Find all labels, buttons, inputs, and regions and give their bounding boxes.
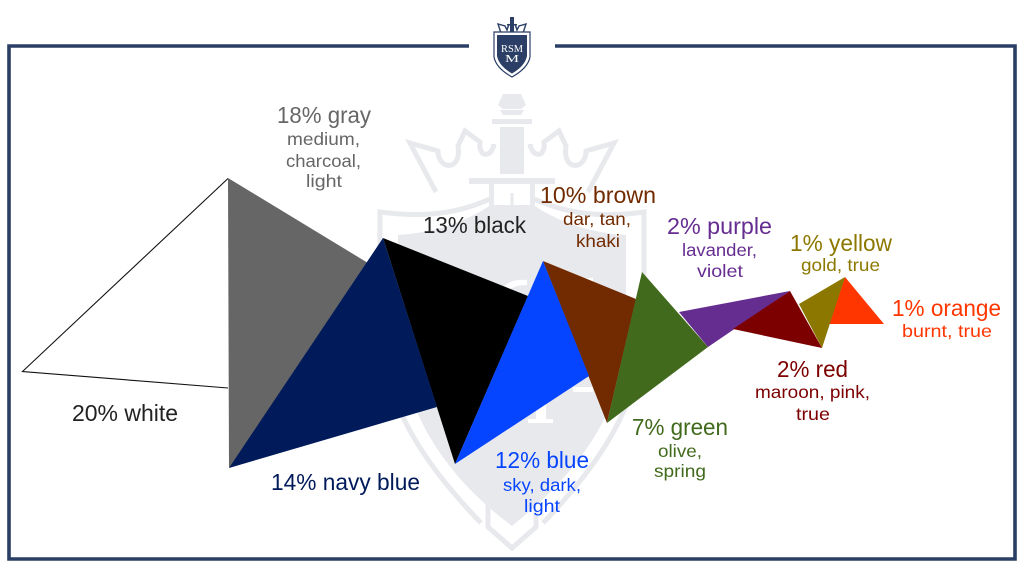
label: orange	[892, 295, 1001, 341]
green segment	[607, 272, 708, 423]
label: red: maroon, pink,	[755, 382, 870, 402]
logo monogram	[501, 44, 523, 65]
label: green: spring	[654, 461, 706, 481]
label: orange: burnt, true	[902, 321, 992, 341]
label: yellow: gold, true	[801, 255, 880, 275]
triangle chart	[22, 178, 884, 468]
label: white: 20% white	[72, 400, 178, 426]
label: yellow: 1% yellow	[790, 230, 892, 256]
label: blue	[495, 447, 589, 516]
label: gray: charcoal,	[286, 151, 361, 171]
black segment	[383, 238, 528, 464]
label: navy blue: 14% navy blue	[271, 469, 420, 495]
watermark: crest	[380, 94, 644, 548]
brown segment	[543, 261, 636, 423]
label: purple: 2% purple	[667, 213, 772, 239]
yellow segment	[799, 277, 845, 348]
label: blue: 12% blue	[495, 447, 589, 473]
label: brown: 10% brown	[540, 182, 656, 208]
label: brown: khaki	[576, 231, 620, 251]
label: brown	[540, 182, 656, 251]
blue segment	[455, 261, 589, 464]
label: purple	[667, 213, 772, 281]
label: green: 7% green	[632, 414, 728, 440]
label: black: 13% black	[423, 212, 526, 238]
label: gray: light	[306, 171, 342, 191]
label: green	[632, 414, 728, 481]
label: gray	[277, 102, 371, 191]
label: blue: light	[524, 496, 560, 516]
navy blue segment	[229, 238, 437, 468]
label: red: true	[796, 404, 830, 424]
red segment	[733, 291, 822, 348]
purple segment	[679, 291, 790, 347]
label: purple: lavander,	[682, 240, 757, 260]
label: green: olive,	[658, 441, 702, 461]
orange segment	[829, 277, 884, 324]
label: purple: violet	[697, 261, 743, 281]
label: yellow	[790, 230, 892, 275]
label: blue: sky, dark,	[503, 475, 581, 495]
white segment	[22, 178, 228, 388]
logo monogram: M	[505, 53, 519, 65]
logo monogram: RSM	[501, 44, 523, 55]
label: gray: 18% gray	[277, 102, 371, 128]
gray segment	[228, 178, 368, 468]
label: orange: 1% orange	[892, 295, 1001, 321]
label: brown: dar, tan,	[563, 209, 631, 229]
logo	[494, 17, 530, 77]
label: gray: medium,	[287, 129, 360, 149]
label: red	[755, 356, 870, 424]
label: red: 2% red	[777, 356, 848, 382]
